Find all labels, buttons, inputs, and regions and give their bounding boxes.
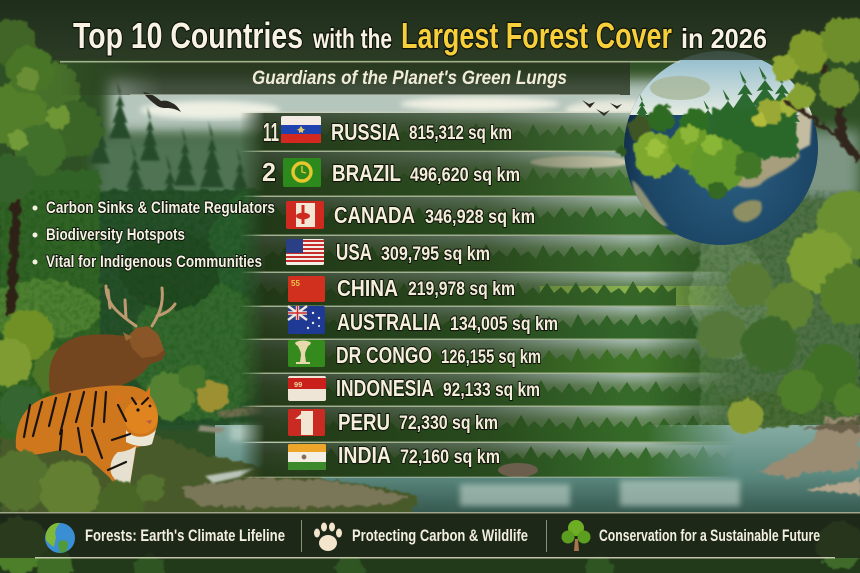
flag: DR Congo — [288, 340, 325, 367]
bullet 1: Carbon Sinks & Climate Regulators — [46, 199, 275, 217]
panel: country ranking rows — [240, 112, 756, 478]
row: India — [240, 442, 746, 478]
row: Russia — [241, 112, 631, 152]
label: India: INDIA — [338, 442, 391, 468]
row: Australia — [242, 305, 726, 340]
label: Brazil: BRAZIL — [332, 160, 401, 186]
upper right tree — [772, 16, 860, 162]
label: Indonesia: INDONESIA — [336, 375, 434, 401]
value: Indonesia: 92,133 sq km — [443, 380, 540, 401]
lower left trees and shrubs — [0, 62, 228, 434]
near left bank — [0, 425, 420, 515]
title text: Largest Forest Cover — [401, 15, 672, 56]
illustration: earth globe with forest — [616, 50, 820, 245]
right trees — [698, 191, 860, 435]
birds — [143, 92, 622, 116]
row: China — [242, 272, 727, 307]
value: Peru: 72,330 sq km — [399, 413, 498, 434]
flag: China: 55 — [291, 279, 300, 288]
rank 2: 2 — [262, 157, 276, 187]
value: Canada: 346,928 sq km — [425, 207, 535, 228]
rocks right — [720, 384, 860, 494]
label: Canada: CANADA — [334, 202, 415, 228]
label: Peru: PERU — [338, 409, 390, 435]
illustration: tiger — [16, 385, 158, 486]
flag: Canada — [286, 201, 324, 229]
footer text 1: Forests: Earth's Climate Lifeline — [85, 527, 285, 545]
flag: Australia — [288, 306, 325, 334]
illustration: stag — [49, 286, 175, 414]
row: DR Congo — [240, 338, 736, 378]
footer text 2: Protecting Carbon & Wildlife — [352, 527, 528, 545]
label: DR Congo: DR CONGO — [336, 342, 432, 368]
label: USA: USA — [336, 239, 372, 265]
value: India: 72,160 sq km — [400, 447, 500, 468]
flag: Russia — [281, 116, 321, 143]
label: Australia: AUSTRALIA — [337, 309, 441, 335]
icon: tree — [562, 520, 590, 551]
row: Indonesia — [242, 372, 728, 407]
row: Peru — [240, 406, 736, 446]
upper left tree canopy — [0, 18, 54, 94]
value: China: 219,978 sq km — [408, 279, 515, 300]
value: Australia: 134,005 sq km — [450, 314, 558, 335]
subtitle: Guardians of the Planet's Green Lungs — [252, 68, 567, 89]
bullet list — [32, 199, 275, 271]
label: China: CHINA — [337, 275, 398, 301]
flag: China — [288, 276, 325, 302]
title text: Top 10 Countries — [73, 15, 303, 56]
title band — [0, 0, 860, 60]
flag: Indonesia: 99 — [294, 380, 302, 389]
value: Brazil: 496,620 sq km — [410, 165, 520, 186]
title text: in 2026 — [681, 23, 767, 54]
subtitle band — [60, 61, 680, 95]
value: Russia: 815,312 sq km — [409, 123, 512, 144]
title text: with the — [312, 23, 392, 54]
rank 11: 11 — [263, 117, 279, 147]
icon: globe — [45, 523, 75, 553]
value: USA: 309,795 sq km — [381, 244, 490, 265]
value: DR Congo: 126,155 sq km — [441, 347, 541, 368]
lake — [215, 425, 860, 515]
distant conifers left — [90, 80, 251, 220]
bullet 3: Vital for Indigenous Communities — [46, 253, 262, 271]
row: Brazil — [242, 150, 636, 197]
flag: Peru — [288, 409, 325, 436]
flag: Indonesia — [288, 376, 326, 401]
flag: India — [288, 444, 326, 470]
row: Canada — [242, 196, 678, 236]
foreground bushes left — [0, 450, 164, 529]
row: USA — [240, 234, 735, 275]
flag: Brazil — [283, 158, 321, 187]
flag: USA — [286, 239, 324, 265]
foliage texture — [0, 190, 860, 425]
icon: paw — [314, 522, 342, 551]
bullet 2: Biodiversity Hotspots — [46, 226, 185, 244]
label: Russia: RUSSIA — [331, 119, 400, 145]
footer bar — [0, 512, 860, 573]
